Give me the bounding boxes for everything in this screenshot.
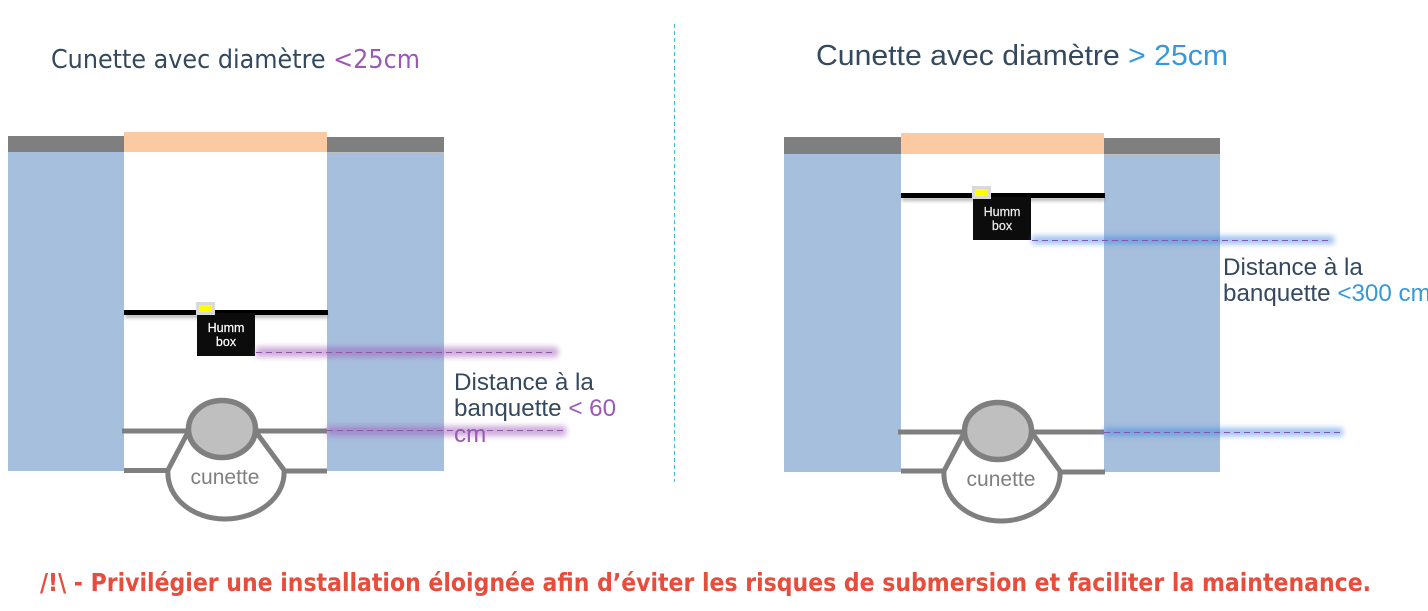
distance label: banquette <300 cm (1223, 280, 1428, 307)
measure line: bottom (327, 426, 566, 436)
heading: right: Cunette avec diamètre > 25cm (816, 40, 1228, 72)
road surface (901, 133, 1104, 154)
distance label: banquette < 60 (454, 395, 616, 422)
distance label: cm (454, 421, 486, 448)
support bar (901, 193, 1105, 201)
left wall (8, 136, 124, 471)
left wall (784, 137, 901, 472)
measure line: top (1032, 236, 1334, 244)
label: cunette: cunette (191, 466, 259, 489)
right wall (327, 137, 444, 471)
sewer channel (898, 402, 1105, 521)
heading: left: Cunette avec diamètre <25cm (51, 45, 420, 75)
icon: sensor (972, 186, 991, 199)
humm box: Humm (984, 205, 1020, 219)
distance label: Distance à la (454, 369, 594, 396)
road surface (124, 132, 327, 152)
measure line: bottom (1104, 428, 1343, 436)
icon: sensor (196, 302, 215, 315)
humm box: box (992, 219, 1013, 233)
label: cunette: cunette (967, 468, 1035, 491)
humm box (197, 313, 255, 356)
panel: diameter over 25cm (784, 40, 1428, 521)
support bar (124, 310, 328, 318)
right wall (1104, 138, 1220, 472)
distance label: Distance à la (1223, 254, 1363, 281)
sewer channel (122, 400, 327, 519)
divider (674, 24, 676, 482)
panel: diameter under 25cm (8, 45, 616, 519)
humm box: Humm (208, 321, 244, 335)
humm box (973, 197, 1031, 240)
measure line: top (256, 347, 558, 357)
humm box: box (216, 335, 237, 349)
